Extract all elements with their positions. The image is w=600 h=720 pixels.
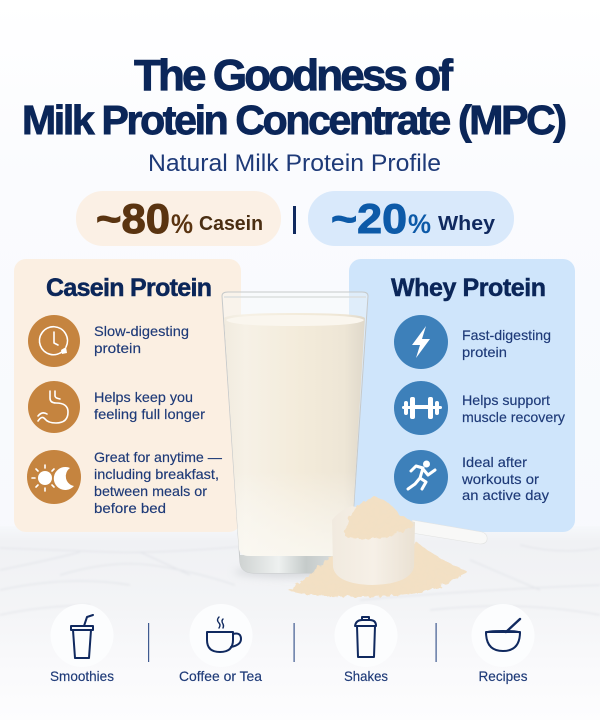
- usage: shakes: [334, 604, 398, 684]
- text: slow-digesting: [94, 323, 189, 356]
- text: great for anytime: including breakfast,: [94, 466, 219, 482]
- powder pile: [288, 543, 468, 597]
- icon: stomach: [28, 381, 80, 433]
- scoop cup: [332, 506, 415, 585]
- text: fast-digesting: [462, 327, 551, 360]
- glass of milk: [222, 292, 368, 578]
- text: feeling full: [94, 389, 205, 422]
- text: ideal after workouts: an active day: [462, 487, 549, 503]
- panel: whey protein: [349, 259, 575, 532]
- text: muscle recovery: Helps support: [462, 392, 550, 408]
- usage: smoothies: [50, 604, 114, 684]
- icon: cup with straw: [71, 615, 93, 658]
- separator: [294, 623, 295, 662]
- icon: coffee cup: [207, 617, 241, 652]
- stat pill: whey: ~20: [331, 195, 407, 242]
- text: muscle recovery: muscle recovery: [462, 409, 565, 425]
- text: ideal after workouts: [461, 454, 549, 503]
- icon: runner: [394, 450, 448, 504]
- stat pill: whey: %: [408, 209, 431, 239]
- icon: dumbbell: [394, 381, 448, 435]
- stat pill: casein: [76, 191, 281, 246]
- usage: shakes: Shakes: [344, 668, 388, 684]
- usage: smoothies: Smoothies: [50, 668, 114, 684]
- icon: bowl with spoon: [486, 619, 520, 651]
- text: great for anytime: before bed: [94, 500, 166, 516]
- text: feeling full: Helps keep you: [94, 389, 193, 405]
- text: fast-digesting: Fast-digesting: [462, 327, 551, 343]
- scoop handle: [412, 520, 487, 544]
- usage: coffee or tea: [179, 604, 262, 684]
- text: great for anytime: between meals or: [94, 483, 207, 499]
- stat pill: casein: Casein: [199, 213, 263, 235]
- stat pill: whey: [308, 191, 514, 246]
- text: slow-digesting: protein: [94, 340, 141, 356]
- stat pill: casein: ~80: [96, 195, 170, 242]
- text: great for anytime: Great for anytime —: [94, 449, 222, 465]
- text: muscle recovery: [462, 392, 565, 425]
- scoop with powder: [332, 497, 487, 585]
- text: ideal after workouts: Ideal after: [462, 454, 527, 470]
- icon: clock: [28, 315, 80, 367]
- usage: recipes: [472, 604, 534, 684]
- title: [22, 51, 567, 143]
- icon: lightning bolt: [394, 315, 448, 369]
- text: great for anytime: [94, 449, 222, 516]
- text: ideal after workouts: workouts or: [461, 471, 539, 487]
- stat pill: casein: %: [171, 209, 193, 239]
- whey heading: Whey Protein: [391, 274, 546, 302]
- separator: [148, 623, 149, 662]
- title: The Goodness of: [134, 51, 453, 100]
- usage: recipes: Recipes: [478, 668, 528, 684]
- text: feeling full: feeling full longer: [94, 406, 205, 422]
- casein heading: Casein Protein: [46, 274, 212, 302]
- stat pill: whey: Whey: [438, 213, 496, 235]
- subtitle: Natural Milk Protein Profile: [148, 150, 441, 177]
- title: Milk Protein Concentrate (MPC): [22, 97, 567, 143]
- text: slow-digesting: Slow-digesting: [94, 323, 189, 339]
- text: fast-digesting: protein: [462, 344, 507, 360]
- pill divider: [293, 206, 296, 234]
- powder mound: [345, 497, 413, 539]
- usage: coffee or tea: Coffee or Tea: [179, 668, 262, 684]
- icon: shaker bottle: [355, 617, 376, 657]
- icon: sun and moon: [27, 450, 81, 504]
- panel: casein protein: [14, 259, 241, 532]
- separator: [436, 623, 437, 662]
